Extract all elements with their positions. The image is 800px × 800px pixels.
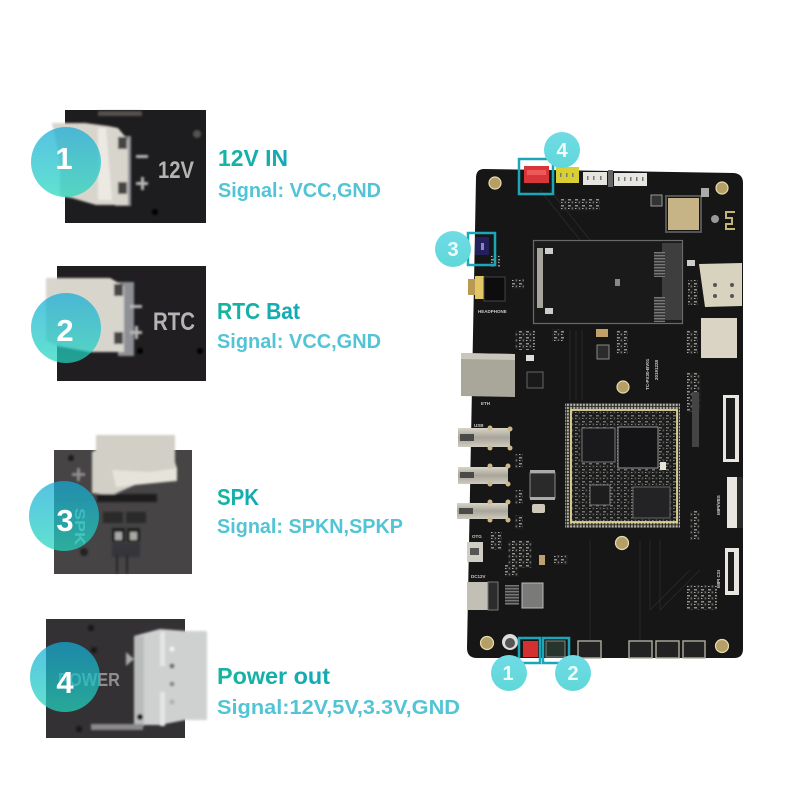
photo label: RTC silk text: RTC — [153, 308, 195, 336]
speaker connector — [475, 237, 489, 255]
micro USB and DC jack — [467, 534, 498, 610]
board outline — [467, 169, 743, 658]
micro USB and DC jack: DC12V — [471, 574, 486, 579]
label: Power out: Signal:12V,5V,3.3V,GND — [217, 697, 460, 719]
label: 12V IN: Signal: VCC,GND — [218, 180, 381, 202]
label: SPK: SPK — [217, 484, 259, 510]
photo: RTC connector closeup — [46, 266, 206, 381]
badge 3: 3 — [56, 503, 74, 538]
small badge 2 — [555, 655, 591, 691]
photo label: POWER silk text: POWER — [58, 670, 120, 690]
right FPC connectors: MIPI/VBS — [716, 495, 721, 515]
photo: SPK connector closeup — [54, 435, 192, 574]
USB ports — [457, 423, 512, 522]
small ICs and passives — [490, 199, 717, 610]
USB ports: USB — [474, 423, 484, 428]
badge 4 — [30, 642, 100, 712]
badge 1: 1 — [55, 141, 73, 176]
micro USB and DC jack: OTG — [472, 534, 482, 539]
small badge 1: 1 — [502, 663, 514, 685]
label: Power out — [217, 663, 460, 719]
badge 2 — [31, 293, 101, 363]
headphone jack: HEADPHONE — [478, 309, 507, 314]
SIM and SD slots — [686, 260, 742, 358]
badge 4: 4 — [56, 665, 74, 700]
small badge 3: 3 — [447, 239, 459, 261]
label: 12V IN — [218, 145, 381, 202]
label: RTC Bat — [217, 298, 381, 353]
label: SPK: Signal: SPKN,SPKP — [217, 516, 403, 538]
small badge 2: 2 — [567, 663, 579, 685]
small badge 1 — [491, 655, 527, 691]
board text TC-PX30: TC-PX30-BV01 — [645, 358, 650, 390]
label: RTC Bat: Signal: VCC,GND — [217, 331, 381, 353]
ethernet port: ETH — [481, 401, 490, 406]
ethernet port — [461, 353, 515, 406]
photo label: 12V silk text: 12V — [158, 157, 194, 184]
M.2 slot — [534, 240, 682, 324]
label: RTC Bat: RTC Bat — [217, 298, 300, 324]
badge 3 — [29, 481, 99, 551]
highlight box 4 — [519, 159, 553, 194]
board text TC-PX30 — [645, 358, 659, 390]
circuit board — [457, 166, 743, 658]
headphone jack — [468, 276, 507, 314]
highlight box 1 — [519, 638, 540, 663]
photo: POWER connector closeup — [46, 619, 207, 738]
label: SPK — [217, 484, 403, 538]
photo: 12V connector closeup — [52, 110, 206, 223]
badge 1 — [31, 127, 101, 197]
inductor and capacitor — [502, 583, 543, 650]
highlight box 3 — [468, 233, 495, 265]
mounting holes — [480, 177, 728, 652]
label: 12V IN: 12V IN — [218, 145, 288, 171]
small badge 4 — [544, 132, 580, 168]
badge 2: 2 — [56, 313, 74, 348]
bottom buttons — [578, 641, 705, 658]
wifi module — [651, 188, 735, 232]
highlight box 2 — [543, 638, 569, 663]
photo label: SPK silk text: SPK — [71, 508, 88, 545]
top header connectors — [524, 166, 647, 187]
right FPC connectors — [716, 395, 743, 595]
bottom power connectors — [523, 641, 565, 657]
small badge 3 — [435, 231, 471, 267]
label: Power out: Power out — [217, 663, 330, 689]
compute module — [565, 403, 680, 528]
right FPC connectors: MIPI CSI — [716, 570, 721, 588]
board text TC-PX30: 20191228 — [654, 359, 659, 380]
small badge 4: 4 — [556, 140, 568, 162]
